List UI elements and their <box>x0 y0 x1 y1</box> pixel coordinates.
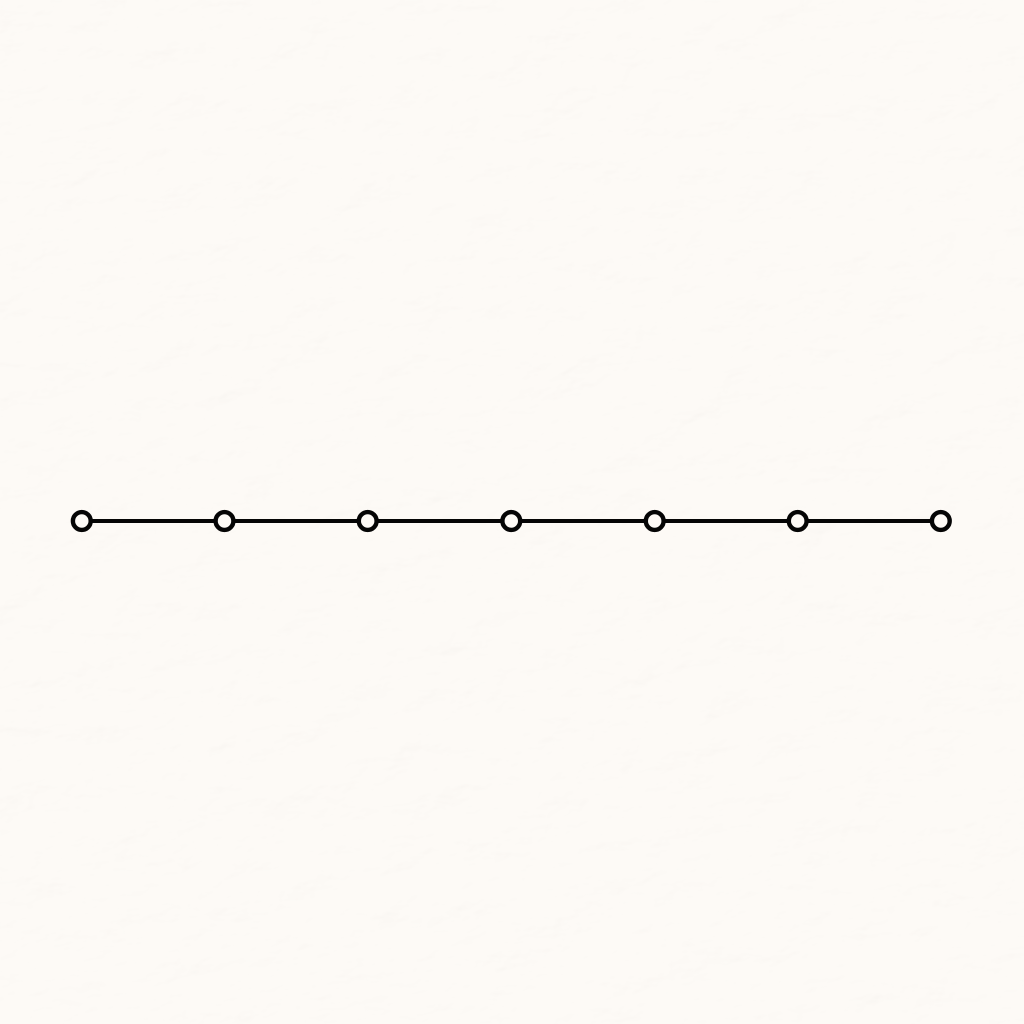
node 5 <box>646 512 664 530</box>
node 4 <box>502 512 520 530</box>
node 3 <box>359 512 377 530</box>
node 1 <box>73 512 91 530</box>
node 6 <box>789 512 807 530</box>
node 2 <box>216 512 233 530</box>
node 7 <box>932 512 950 530</box>
timeline <box>73 512 950 530</box>
